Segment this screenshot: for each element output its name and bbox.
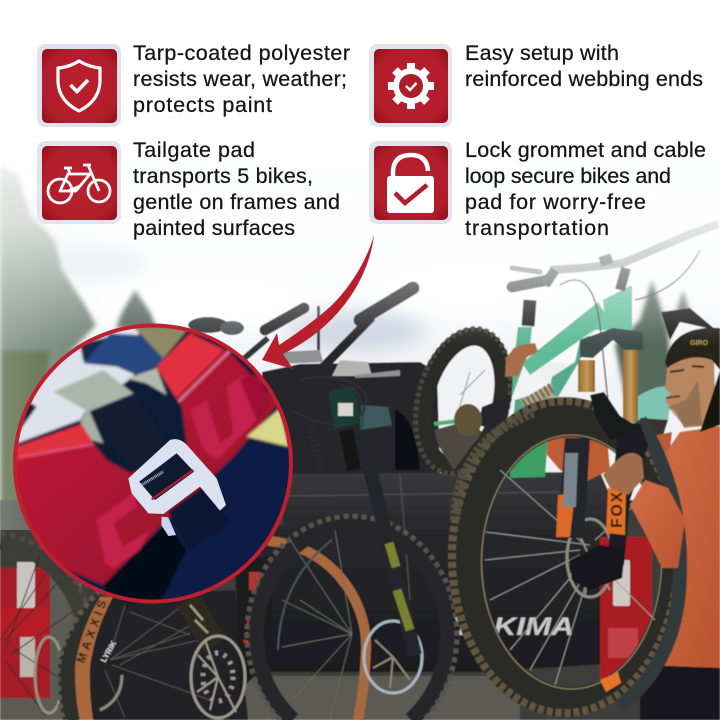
soft light haze on left [0,200,130,530]
feature text one: protects paint [133,93,272,117]
buckle [128,439,226,514]
icon tile: gear with check [369,44,452,127]
tailgate pad [250,472,612,672]
hub lettering: LYRIK [99,639,118,664]
green bike frame, fork and handlebars [434,224,718,470]
feature: easy setup [369,41,703,127]
rider hand on seat tube [505,343,538,377]
circle red border [15,326,291,602]
feature text four: transportation [465,216,609,240]
strap [80,373,187,473]
foreground bike rotor [567,519,613,597]
icon tile: shield with check [37,44,121,127]
feature text two: transports 5 bikes, [133,164,313,188]
feature text two: gentle on frames and [133,190,340,214]
foreground fork with orange Fox logo [556,392,648,590]
tyre orange valve label [600,672,621,692]
feature text one: Tarp-coated polyester [133,41,350,65]
icon tile: open padlock with check [369,141,452,224]
trees on the left [0,165,157,530]
bike wheel with Fox fork, centre [247,516,457,720]
middle bike fork with red lettering: LYRIK [240,599,266,646]
circle background [18,328,282,590]
feature text two: Tailgate pad [133,138,255,162]
lower strap [168,483,230,550]
truck taillight left [0,562,50,698]
rider sleeve and hand [603,453,685,568]
clouds [50,246,670,370]
green bike grips and bars [512,280,548,287]
feature text one: resists wear, weather; [133,67,347,91]
feature: lock grommet [369,138,706,240]
feature text four: loop secure bikes and [465,164,671,188]
frame lettering [97,493,150,568]
rider with orange jacket [640,308,720,720]
distant trees on the right [615,280,690,440]
feature text three: Easy setup with [465,41,619,65]
tailgate and bumper [0,500,720,720]
middle bike fork with red lettering [235,555,272,690]
icon tile: bicycle [37,141,121,224]
feature text two: painted surfaces [133,216,295,240]
rider with orange jacket: GIRO [690,340,708,347]
left bike wheel [0,533,96,720]
velcro ends [53,370,133,412]
pad logo: YAKIMA [452,613,574,641]
detail circle: strap and buckle close-up [10,323,297,603]
large foreground wheel [448,397,682,717]
tan rim wheel behind [268,541,366,720]
truck taillight right [600,537,652,679]
feature: tailgate pad [37,138,340,240]
rotor on the centre bike [364,621,422,693]
brake rotor centre [191,636,245,718]
feature text three: reinforced webbing ends [465,67,703,91]
foreground fork with orange Fox logo: FOX [609,492,626,528]
white fade at top of photo [0,0,720,345]
rider helmet [665,328,720,370]
feature: tarp-coated polyester [37,41,350,127]
Maxxis wheel with tan sidewall [58,590,248,720]
navy lower area [102,545,186,588]
second rider with mint helmet and jacket behind bike [510,360,672,482]
green bike rear wheel [400,318,526,484]
rider face [665,352,716,428]
Maxxis sidewall lettering: MAXXIS [74,598,109,665]
arrow pointing to detail circle [262,235,374,369]
truck cab [262,306,440,474]
centre bike handlebars and fork [188,288,415,655]
rotor on the left wheel [35,637,63,713]
feature text four: pad for worry-free [465,190,646,214]
feature text four: Lock grommet and cable [465,138,706,162]
red bike frame [13,333,278,585]
